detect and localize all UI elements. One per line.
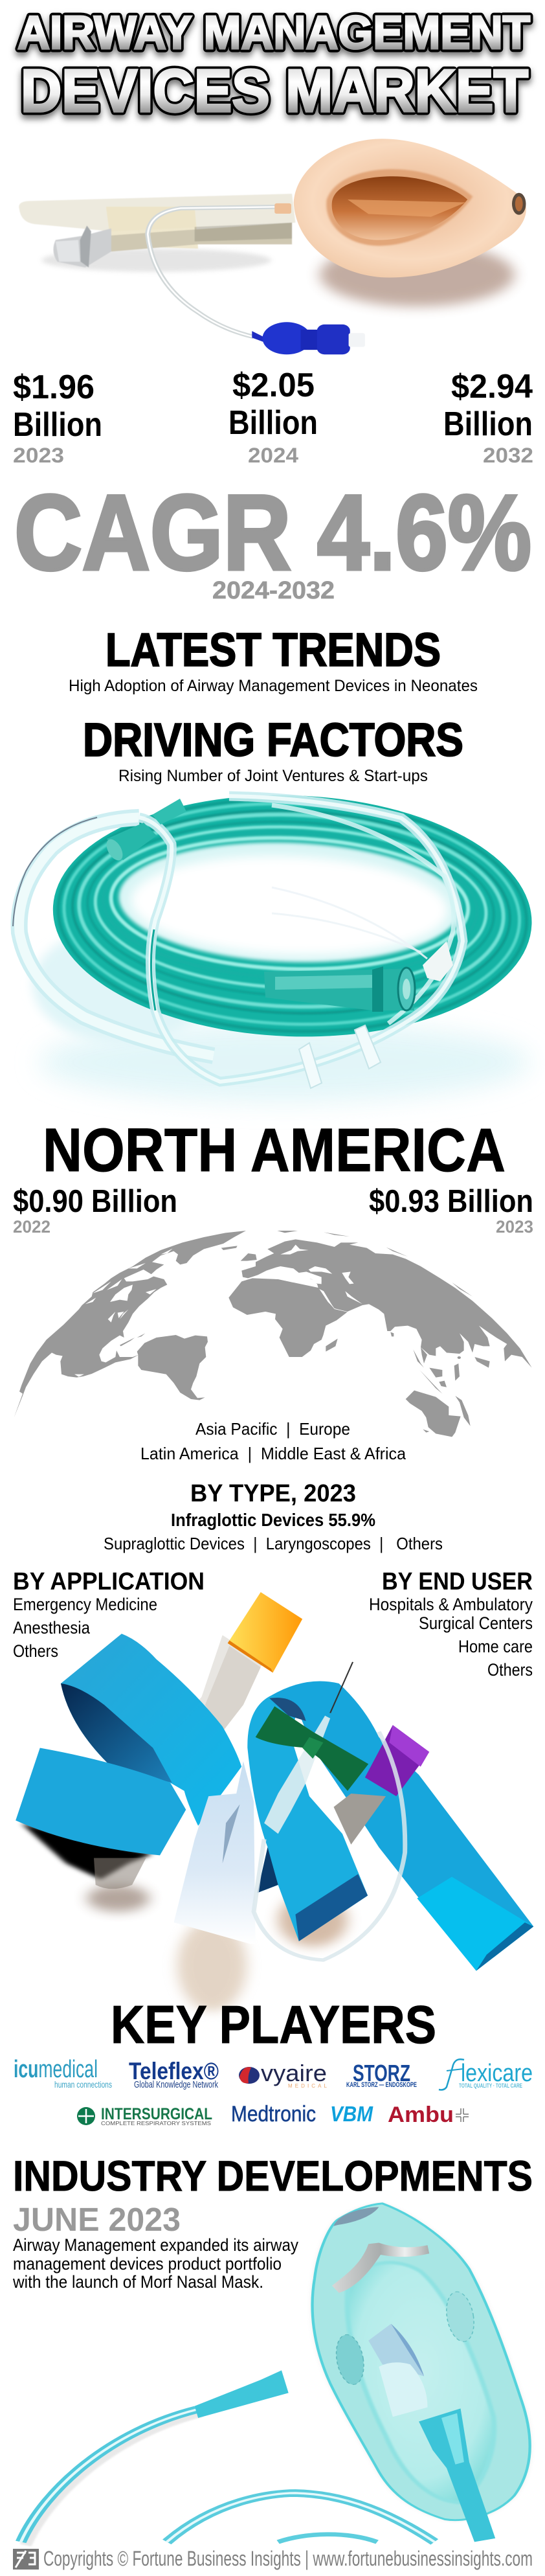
logo: teleflex: Global Knowledge Network [134, 2079, 218, 2090]
regional value 2022 [13, 1184, 177, 1237]
latest trends: LATEST TRENDS [106, 624, 441, 676]
logo: medtronic: Medtronic [231, 2102, 316, 2126]
stat: 2023 market size: Billion [13, 406, 102, 444]
image: tourniquet and blood collection set [16, 1592, 533, 2011]
stat: 2024 market size: $2.05 [232, 367, 315, 404]
image: oxygen tubing coil [13, 787, 536, 1101]
by end user list: Hospitals & Ambulatory [369, 1595, 533, 1614]
driving factors: Rising Number of Joint Ventures & Start-ups [118, 767, 428, 785]
by type section: Infraglottic Devices 55.9% [171, 1510, 375, 1530]
regional value 2022: $0.90 Billion [13, 1184, 177, 1219]
stat: 2024 market size: Billion [228, 404, 318, 442]
logo: intersurgical: COMPLETE RESPIRATORY SYSTEMS [101, 2121, 211, 2126]
regional value 2023: 2023 [496, 1217, 533, 1237]
by end user list: Home care [458, 1637, 533, 1656]
by application list: Anesthesia [13, 1618, 91, 1637]
other regions list [140, 1419, 406, 1463]
stat: 2032 market size: $2.94 [451, 368, 533, 405]
by end user list: BY END USER [382, 1568, 533, 1595]
key players heading: KEY PLAYERS [111, 1994, 436, 2055]
other regions list: Asia Pacific | Europe [195, 1419, 350, 1439]
by type section: Supraglottic Devices | Laryngoscopes | Others [104, 1534, 443, 1553]
stat: 2024 market size: 2024 [248, 444, 298, 467]
by type section: BY TYPE, 2023 [190, 1480, 356, 1507]
stat: 2032 market size: 2032 [483, 444, 533, 467]
by end user list: Others [487, 1660, 533, 1680]
development text: management devices product portfolio [13, 2254, 282, 2274]
logo: storz: STORZ [353, 2060, 410, 2086]
by application list [13, 1568, 205, 1661]
logo: storz [346, 2060, 417, 2089]
stat: 2032 market size [443, 368, 533, 467]
title: DEVICES MARKET [21, 57, 528, 124]
by application list: BY APPLICATION [13, 1568, 205, 1595]
logo: flexicare: TOTAL QUALITY · TOTAL CARE [459, 2082, 522, 2089]
logo: ambu: Ambu [388, 2103, 454, 2127]
logo: intersurgical [77, 2105, 212, 2126]
logo: vyaire: vyaire [261, 2060, 327, 2086]
logo: vyaire [239, 2060, 328, 2089]
footer: logo [13, 2549, 39, 2570]
logo: flexicare: lexicare [461, 2060, 533, 2087]
other regions list: Latin America | Middle East & Africa [140, 1444, 406, 1463]
logo: intersurgical: INTERSURGICAL [101, 2105, 212, 2123]
logo: teleflex: Teleflex® [129, 2058, 219, 2084]
development date: JUNE 2023 [13, 2201, 181, 2238]
CAGR period: 2024-2032 [212, 577, 335, 604]
by end user list: Surgical Centers [419, 1613, 533, 1633]
logos: key players [14, 2056, 533, 2127]
logo: vyaire: MEDICAL [288, 2083, 328, 2089]
stat: 2032 market size: Billion [443, 405, 533, 443]
title: AIRWAY MANAGEMENT [17, 7, 530, 59]
stat: 2023 market size: 2023 [13, 444, 64, 467]
world map [14, 1231, 532, 1437]
stat: 2023 market size [13, 369, 102, 467]
image: laryngeal mask airway [19, 139, 526, 354]
logo: flexicare [439, 2059, 533, 2090]
latest trends: High Adoption of Airway Management Devices in Neonates [69, 677, 478, 695]
logo: icu medical: icumedical [14, 2056, 98, 2083]
development text: with the launch of Morf Nasal Mask. [12, 2272, 263, 2292]
logo: icu medical: human connections [54, 2079, 112, 2090]
by application list: Others [13, 1641, 58, 1661]
development text: Airway Management expanded its airway [13, 2235, 298, 2255]
by end user list [369, 1568, 533, 1680]
stat: 2023 market size: $1.96 [13, 369, 95, 406]
stat: 2024 market size [228, 367, 318, 467]
title [17, 7, 530, 124]
logo: storz: KARL STORZ — ENDOSKOPE [346, 2081, 417, 2089]
development text [12, 2235, 298, 2292]
image: nasal mask and tube [21, 2204, 530, 2546]
logo: vbm: VBM [330, 2102, 373, 2126]
driving factors [83, 714, 463, 785]
title: DEVICES MARKET [21, 57, 528, 124]
regional value 2022: 2022 [13, 1217, 50, 1237]
title: AIRWAY MANAGEMENT [17, 7, 530, 59]
latest trends [69, 624, 478, 695]
regional value 2023 [369, 1184, 533, 1237]
by application list: Emergency Medicine [13, 1595, 157, 1614]
driving factors: DRIVING FACTORS [83, 714, 463, 766]
by type section [104, 1480, 443, 1553]
